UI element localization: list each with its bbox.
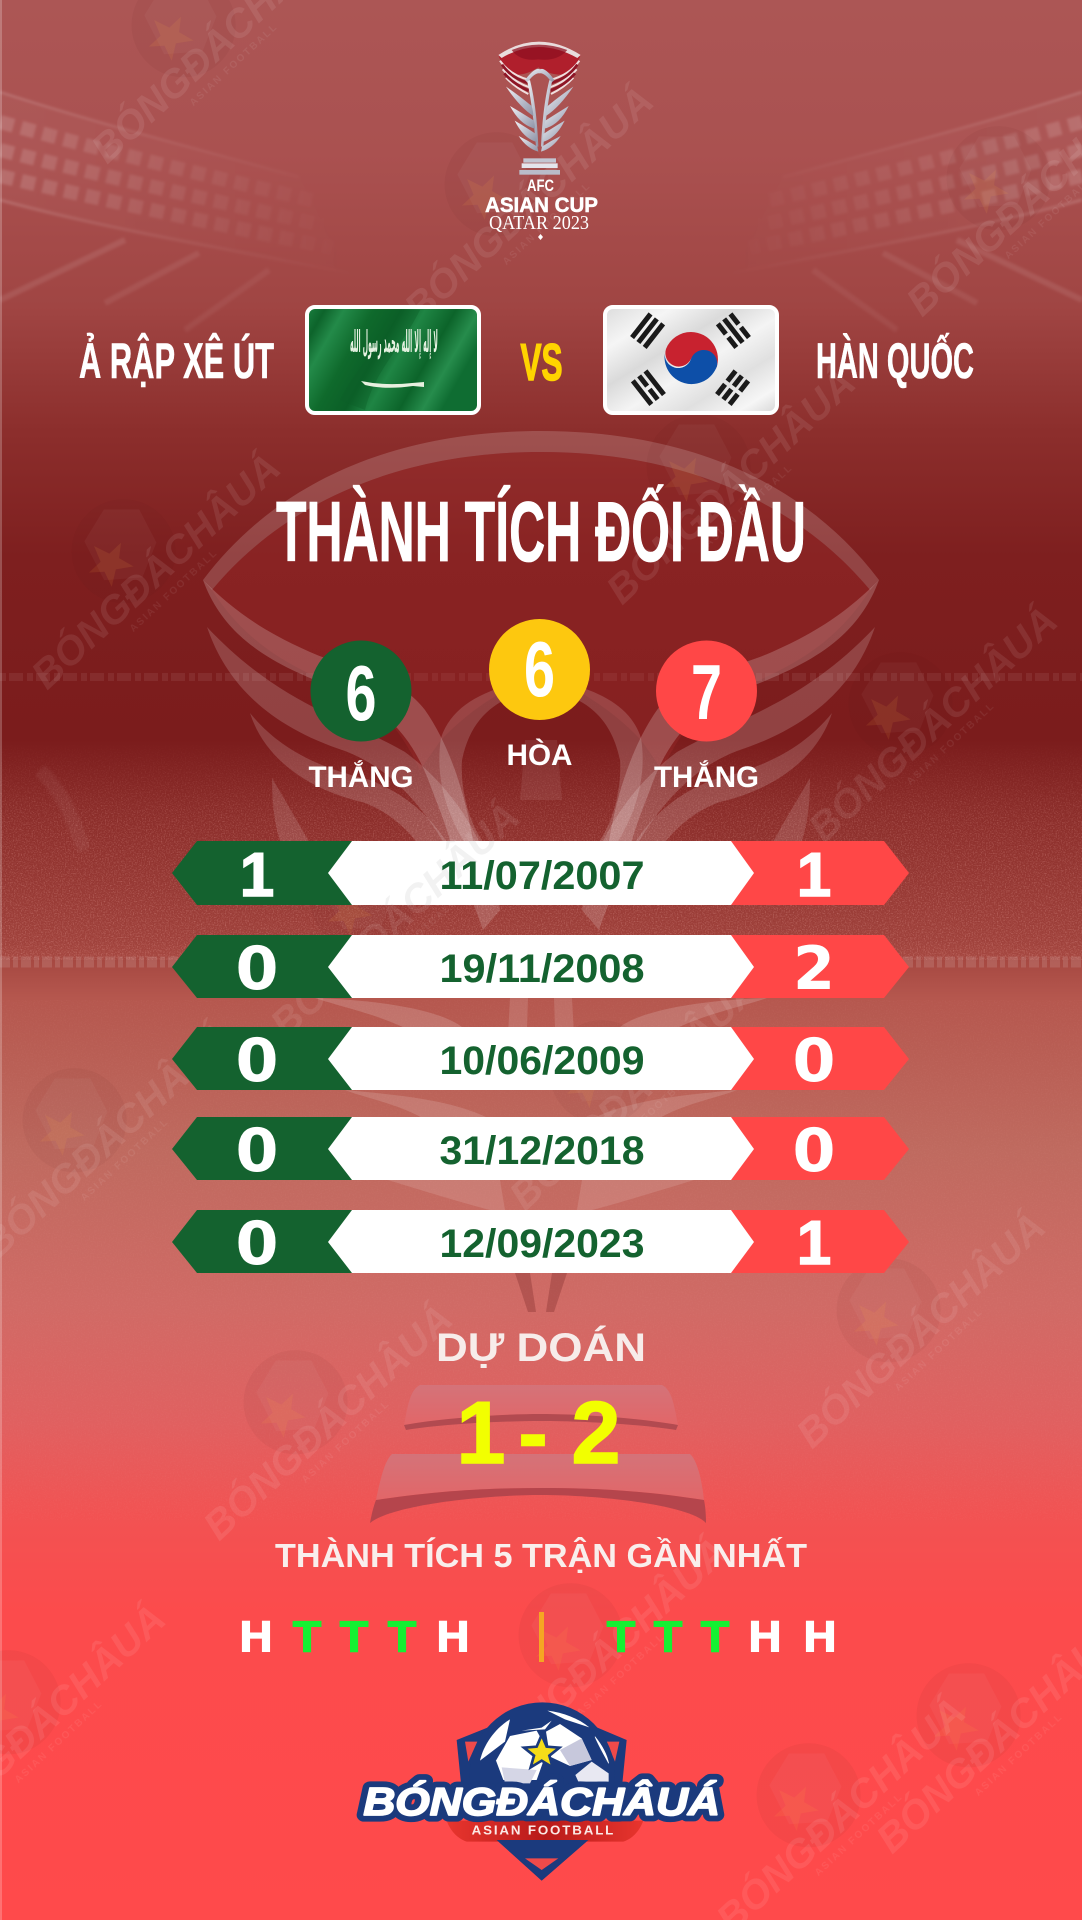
form: South Korea: T <box>700 1613 730 1663</box>
icon: star <box>524 1735 559 1767</box>
background: brand watermarks: ASIAN FOOTBALL <box>606 1068 698 1156</box>
stat: Saudi Arabia wins <box>308 640 414 794</box>
result row: 11/07/2007: 11/07/2007 <box>440 854 644 898</box>
background: brand watermarks: ASIAN FOOTBALL <box>188 21 280 109</box>
result row: 12/09/2023: 0 <box>236 1209 278 1279</box>
text: QATAR 2023: QATAR 2023 <box>489 212 589 234</box>
form: Saudi Arabia: H <box>435 1613 471 1663</box>
stat: South Korea wins <box>654 640 759 794</box>
result row: 31/12/2018: 0 <box>236 1116 278 1186</box>
prediction score: 1 - 2: 1 <box>457 1383 505 1482</box>
team name: South Korea: HÀN QUỐC <box>816 332 974 389</box>
match header: teams and flags: لا إله إلا الله محمد رسول الله <box>350 325 438 360</box>
background: brand watermarks: BÓNGĐÁCHÂUÁ <box>194 1295 461 1548</box>
form: South Korea: T <box>653 1613 683 1663</box>
heading: last five matches: THÀNH TÍCH 5 TRẬN GẦN NHẤT <box>275 1537 807 1574</box>
form: South Korea: T <box>606 1613 636 1663</box>
brand logo: Bóng Đá Châu Á <box>363 1702 720 1881</box>
result row: 19/11/2008: 19/11/2008 <box>440 947 644 991</box>
form: Saudi Arabia: T <box>292 1613 322 1663</box>
result row: 12/09/2023: 1 <box>797 1209 831 1278</box>
flag: South Korea <box>605 307 777 413</box>
form: Saudi Arabia: T <box>387 1613 417 1663</box>
background: brand watermarks: BÓNGĐÁCHÂUÁ <box>787 1203 1054 1456</box>
form: Saudi Arabia: H <box>238 1613 274 1663</box>
stat: South Korea wins: 7 <box>691 648 722 736</box>
stat: Saudi Arabia wins: 6 <box>346 649 376 737</box>
result row: 11/07/2007 <box>172 841 909 905</box>
flag: Saudi Arabia <box>307 307 479 413</box>
text: ASIAN CUP: ASIAN CUP <box>485 194 598 217</box>
text: AFC: AFC <box>527 176 554 195</box>
text: Asian Football: ASIAN FOOTBALL <box>472 1823 613 1838</box>
result row: 12/09/2023: 12/09/2023 <box>440 1222 644 1266</box>
background: brand watermarks: ASIAN FOOTBALL <box>813 1791 905 1879</box>
background: brand watermarks: ASIAN FOOTBALL <box>128 547 220 635</box>
match header: teams and flags <box>79 307 974 413</box>
panel: head-to-head results <box>172 841 909 1273</box>
stat: draws: 6 <box>524 625 555 713</box>
icon: trophy <box>498 42 581 175</box>
icon: diamond dot <box>538 234 543 240</box>
form: South Korea: H <box>747 1613 783 1663</box>
form: Saudi Arabia <box>238 1613 471 1663</box>
prediction score: 1 - 2: - <box>518 1383 548 1482</box>
background: brand watermarks: ASIAN FOOTBALL <box>79 1116 171 1204</box>
result row: 31/12/2018: 0 <box>792 1116 836 1186</box>
result row: 19/11/2008: 2 <box>793 934 835 1004</box>
wordmark: BÓNGĐÁCHÂUÁ <box>363 1780 720 1824</box>
panel: win draw win tally <box>308 619 759 794</box>
result row: 31/12/2018: 31/12/2018 <box>440 1129 644 1173</box>
stat: draws: HÒA <box>506 738 572 772</box>
result row: 11/07/2007: 1 <box>240 841 274 910</box>
background: large translucent trophy <box>203 431 879 1312</box>
result row: 10/06/2009: 0 <box>792 1026 836 1096</box>
background: brand watermarks: ASIAN FOOTBALL <box>893 1306 985 1394</box>
result row: 10/06/2009: 0 <box>236 1026 278 1096</box>
heading: prediction: DỰ DOÁN <box>436 1325 646 1370</box>
result row: 19/11/2008 <box>172 934 909 1004</box>
background: brand watermarks: ASIAN FOOTBALL <box>905 700 997 788</box>
background: brand watermarks: BÓNGĐÁCHÂUÁ <box>395 77 662 330</box>
background: brand watermarks: BÓNGĐÁCHÂUÁ <box>22 444 289 697</box>
prediction score: 1 - 2: 2 <box>572 1383 620 1482</box>
result row: 19/11/2008: 0 <box>236 934 278 1004</box>
text: VS: VS <box>520 334 562 392</box>
form: South Korea <box>606 1613 838 1663</box>
result row: 10/06/2009: 10/06/2009 <box>440 1039 644 1083</box>
tournament logo: AFC Asian Cup Qatar 2023 <box>485 42 598 240</box>
result row: 11/07/2007: 1 <box>797 841 831 910</box>
result row: 10/06/2009 <box>172 1026 909 1096</box>
icon: football <box>470 1702 615 1848</box>
stat: Saudi Arabia wins: THẮNG <box>308 760 414 794</box>
team name: Saudi Arabia: Ả RẬP XÊ ÚT <box>79 333 274 389</box>
prediction score: 1 - 2 <box>457 1383 620 1482</box>
background: brand watermarks: ASIAN FOOTBALL <box>300 1398 392 1486</box>
result row: 12/09/2023 <box>172 1209 909 1279</box>
ribbon <box>447 1821 643 1842</box>
prediction score plate <box>370 1383 706 1523</box>
background: brand watermarks: ASIAN FOOTBALL <box>575 1631 667 1719</box>
icon: shield <box>457 1727 627 1881</box>
background: brand watermarks: ASIAN FOOTBALL <box>973 1711 1065 1799</box>
form: South Korea: H <box>802 1613 838 1663</box>
stat: South Korea wins: THẮNG <box>654 760 759 794</box>
stat: draws <box>489 619 590 772</box>
background: brand watermarks: BÓNGĐÁCHÂUÁ <box>469 1528 736 1781</box>
background: brand watermarks: BÓNGĐÁCHÂUÁ <box>261 793 528 1046</box>
background: brand watermarks: ASIAN FOOTBALL <box>501 180 593 268</box>
panel: recent form <box>238 1612 838 1663</box>
result row: 11/07/2007: BÓNGĐÁCHÂUÁ <box>261 793 528 1046</box>
background: brand watermarks: ASIAN FOOTBALL <box>13 1698 105 1786</box>
result row: 31/12/2018 <box>172 1116 909 1186</box>
divider bar <box>539 1612 544 1662</box>
wordmark: BÓNGĐÁCHÂUÁ <box>363 1780 720 1824</box>
background: brand watermarks: BÓNGĐÁCHÂUÁ <box>500 965 767 1218</box>
form: Saudi Arabia: T <box>339 1613 369 1663</box>
background: brand watermarks: ASIAN FOOTBALL <box>367 896 459 984</box>
background: brand watermarks: BÓNGĐÁCHÂUÁ <box>799 597 1066 850</box>
background: brand watermarks: ASIAN FOOTBALL <box>703 462 795 550</box>
background: brand watermarks: BÓNGĐÁCHÂUÁ <box>597 359 864 612</box>
